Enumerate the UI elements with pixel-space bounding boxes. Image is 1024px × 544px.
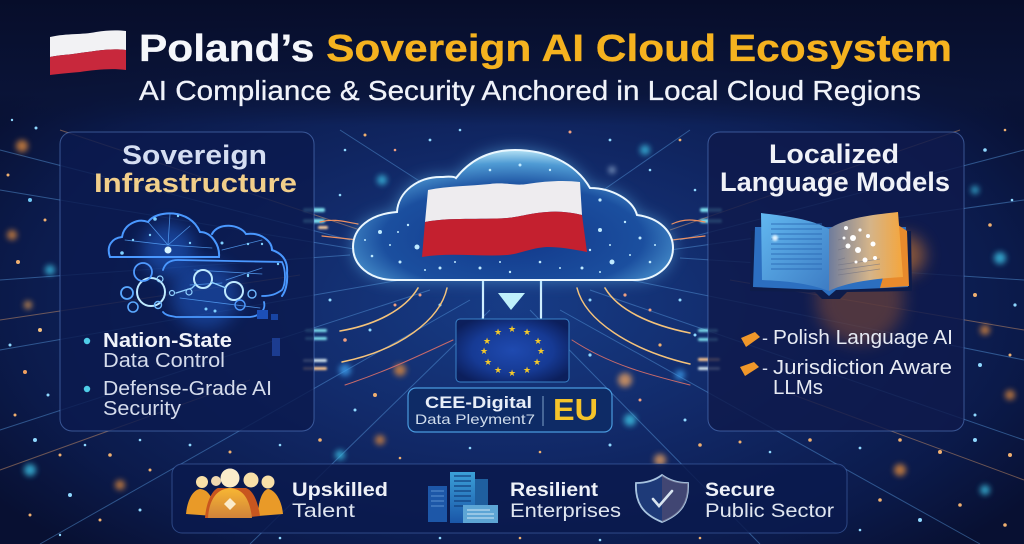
heading: localized language models: Language Models <box>720 167 950 197</box>
heading: sovereign infrastructure <box>94 140 297 198</box>
bullets: sovereign infrastructure: Defense-Grade AI <box>103 378 272 400</box>
bullets: localized language models: Polish Language AI <box>773 327 953 349</box>
EU flag: ★ <box>508 368 516 378</box>
EU flag: ★ <box>494 327 502 337</box>
EU flag: ★ <box>533 357 541 367</box>
bullets: localized language models: Jurisdiction Aware <box>773 357 952 379</box>
EU flag: ★ <box>483 336 491 346</box>
label: CEE-Digital EU badge: Data Pleyment7 <box>415 411 535 427</box>
EU flag: ★ <box>537 346 545 356</box>
label: CEE-Digital EU badge: CEE-Digital <box>425 393 532 412</box>
subtitle: AI Compliance & Security Anchored in Local Cloud Regions <box>139 75 921 106</box>
heading: localized language models: Localized <box>769 139 899 169</box>
text: secure public sector: Public Sector <box>705 500 835 522</box>
title: Poland’s Sovereign AI Cloud Ecosystem <box>139 28 952 70</box>
text: upskilled talent <box>292 479 388 522</box>
EU flag: ★ <box>523 365 531 375</box>
EU flag: ★ <box>480 346 488 356</box>
bullets: sovereign infrastructure <box>84 330 272 420</box>
bullets: localized language models: - <box>762 358 768 378</box>
panel: outcomes strip <box>172 464 847 533</box>
panel: sovereign infrastructure <box>60 132 314 431</box>
text: resilient enterprises: Resilient <box>510 479 599 501</box>
icon: network clouds <box>109 213 287 356</box>
EU flag: ★ <box>484 357 492 367</box>
text: resilient enterprises: Enterprises <box>510 500 621 522</box>
data stream glints beside the side panels <box>303 208 722 370</box>
text: upskilled talent: Upskilled <box>292 479 388 501</box>
EU flag: ★ <box>508 324 516 334</box>
EU flag: ★ <box>523 327 531 337</box>
flag: Poland waving <box>422 181 587 257</box>
flag icon: Poland <box>50 30 126 75</box>
text: resilient enterprises <box>510 479 621 522</box>
bullets: sovereign infrastructure: Security <box>103 398 181 420</box>
EU flag: ★ <box>494 365 502 375</box>
panel: localized language models <box>708 132 964 431</box>
connectors: glowing data curves <box>320 220 705 385</box>
icon: shield with check <box>636 475 688 522</box>
text: secure public sector <box>705 479 835 522</box>
bullets: localized language models <box>740 327 953 399</box>
bullets: localized language models: LLMs <box>773 377 823 399</box>
label: CEE-Digital EU badge: EU <box>553 392 598 427</box>
EU flag <box>456 319 569 382</box>
EU flag: ★ <box>534 336 542 346</box>
label: CEE-Digital EU badge <box>408 388 612 432</box>
arrow: cloud down to EU <box>498 293 525 310</box>
icon: talent group <box>186 468 283 518</box>
heading: localized language models <box>720 139 950 197</box>
bullets: sovereign infrastructure: Nation-State <box>103 330 232 352</box>
bullets: sovereign infrastructure: Data Control <box>103 350 225 372</box>
icon: enterprise buildings <box>428 472 498 523</box>
cloud with Polish flag <box>353 150 673 280</box>
text: secure public sector: Secure <box>705 479 775 501</box>
text: upskilled talent: Talent <box>292 500 356 522</box>
bullets: localized language models: - <box>762 328 768 348</box>
heading: sovereign infrastructure: Infrastructure <box>94 168 297 198</box>
heading: sovereign infrastructure: Sovereign <box>122 140 267 170</box>
icon: open book <box>750 212 912 299</box>
